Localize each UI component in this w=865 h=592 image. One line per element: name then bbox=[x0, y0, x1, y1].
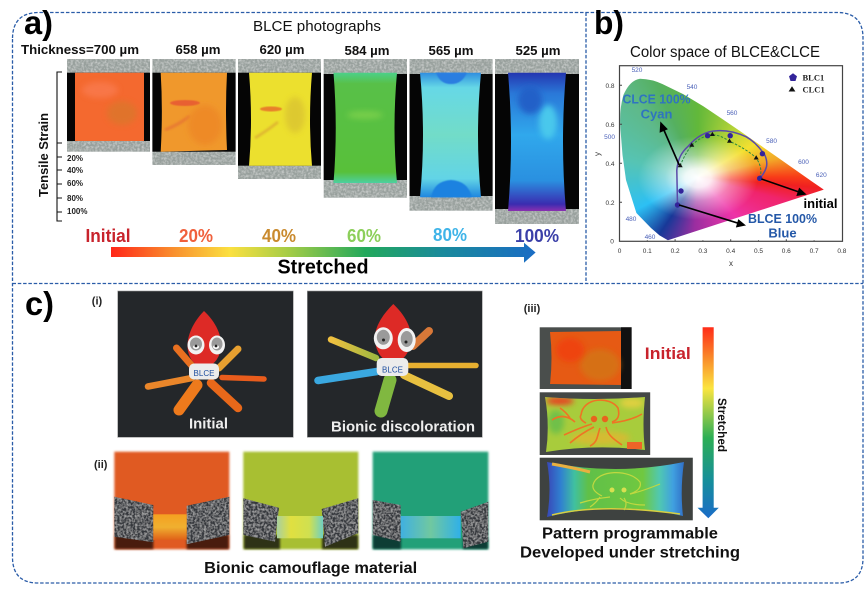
axis tick labels: 0.6 bbox=[782, 248, 791, 255]
plot frame and ticks bbox=[620, 66, 842, 241]
tensile strain axis bbox=[36, 72, 87, 221]
thickness labels: 658 µm bbox=[176, 42, 220, 57]
photo: 620 µm sample bbox=[238, 59, 321, 179]
panel: a) BLCE photographs bbox=[21, 4, 579, 278]
axis tick labels: 0.8 bbox=[605, 83, 615, 90]
photo: orange camouflage bbox=[114, 452, 229, 549]
photo: 584 µm sample bbox=[324, 59, 407, 198]
axis tick labels: 0.5 bbox=[754, 248, 763, 255]
axis tick labels: 0.6 bbox=[605, 122, 615, 129]
photo: 658 µm sample bbox=[152, 59, 236, 165]
thickness labels bbox=[21, 42, 560, 58]
axis tick labels: y bbox=[593, 152, 602, 156]
photo: pattern emerging bbox=[540, 392, 650, 455]
tensile strain axis: Tensile Strain bbox=[36, 113, 51, 197]
caption: Bionic camouflage material: Bionic camouflage material bbox=[204, 560, 417, 577]
photo: bionic discoloration squid: BLCE bbox=[382, 366, 403, 374]
photo: 700 µm initial sample bbox=[67, 59, 150, 152]
strain percentage labels bbox=[86, 225, 559, 246]
panel: b) colour space bbox=[593, 4, 847, 268]
caption: Pattern programmable: Pattern programmable bbox=[542, 526, 718, 542]
tensile strain axis: 40% bbox=[67, 166, 83, 175]
tensile strain axis: 100% bbox=[67, 207, 87, 216]
wavelength labels: 540 bbox=[687, 84, 698, 91]
BLC1 markers bbox=[675, 133, 765, 208]
wavelength labels: 460 bbox=[645, 234, 656, 241]
chart annotations: initial bbox=[804, 196, 837, 211]
thickness labels: 565 µm bbox=[428, 43, 474, 58]
axis tick labels: 0 bbox=[618, 248, 622, 255]
label: (iii): (iii) bbox=[524, 303, 541, 315]
photo: bionic discoloration squid bbox=[307, 291, 482, 437]
thickness labels: 525 µm bbox=[516, 43, 560, 58]
photo: teal camouflage bbox=[373, 452, 488, 549]
BLC1 curve bbox=[677, 131, 767, 205]
caption: Developed under stretching: Developed under stretching bbox=[520, 544, 740, 562]
wavelength labels: 580 bbox=[766, 138, 777, 145]
thickness labels: Thickness=700 µm bbox=[21, 42, 139, 57]
photo: pattern fully stretched bbox=[540, 458, 693, 520]
strain percentage labels: 60% bbox=[347, 226, 381, 246]
photo: initial squid bbox=[118, 291, 293, 437]
wavelength labels: 480 bbox=[626, 216, 637, 223]
axis tick labels: 0.1 bbox=[643, 248, 652, 255]
photo: 565 µm sample bbox=[410, 59, 493, 211]
photo: initial pattern sample bbox=[540, 327, 632, 389]
axis tick labels: 0.3 bbox=[698, 248, 708, 255]
photo: 525 µm sample bbox=[495, 59, 579, 224]
photo: initial squid: BLCE bbox=[194, 369, 214, 378]
label: Stretched: Stretched bbox=[278, 256, 368, 278]
thickness labels: 584 µm bbox=[344, 43, 390, 58]
wavelength labels: 600 bbox=[798, 159, 809, 166]
axis tick labels bbox=[593, 83, 847, 268]
axis tick labels: 0.4 bbox=[605, 161, 615, 168]
photo: bionic discoloration squid: Bionic discoloration bbox=[331, 418, 475, 436]
chart annotations: CLCE 100% bbox=[622, 92, 691, 106]
label: Initial (iii): Initial bbox=[645, 345, 691, 363]
strain percentage labels: 20% bbox=[179, 226, 213, 246]
strain percentage labels: 100% bbox=[515, 226, 559, 246]
axis tick labels: 0.2 bbox=[671, 248, 680, 255]
label: Stretched (vertical): Stretched bbox=[715, 398, 727, 452]
legend: BLC1 bbox=[802, 72, 824, 82]
heading: c): c) bbox=[25, 285, 54, 322]
arrow: vertical gradient bbox=[698, 327, 719, 518]
arrows bbox=[660, 123, 805, 226]
heading: a): a) bbox=[24, 4, 53, 41]
strain percentage labels: Initial bbox=[86, 226, 130, 246]
tensile strain axis: 60% bbox=[67, 179, 83, 188]
legend: CLC1 bbox=[802, 84, 825, 94]
CLC1 markers bbox=[678, 132, 759, 167]
photo: yellow-green camouflage bbox=[243, 452, 358, 549]
label: (i): (i) bbox=[92, 296, 103, 308]
axis tick labels: 0.8 bbox=[837, 248, 847, 255]
strain percentage labels: 80% bbox=[433, 225, 467, 245]
wavelength labels: 520 bbox=[632, 67, 643, 74]
thickness labels: 620 µm bbox=[260, 42, 304, 57]
axis tick labels: 0.2 bbox=[605, 200, 615, 207]
CLC1 curve bbox=[680, 135, 761, 178]
chart annotations: Cyan bbox=[641, 106, 672, 122]
chromaticity chart bbox=[593, 65, 847, 268]
tensile strain axis: 80% bbox=[67, 194, 83, 203]
chart annotations: BLCE 100% bbox=[748, 211, 817, 226]
wavelength labels: 500 bbox=[604, 134, 615, 141]
label: (ii): (ii) bbox=[94, 459, 108, 471]
chart annotations: Blue bbox=[768, 226, 797, 240]
horseshoe colour gamut bbox=[620, 78, 824, 240]
axis tick labels: 0 bbox=[610, 238, 614, 246]
wavelength labels bbox=[604, 67, 827, 241]
panel: c) applications bbox=[25, 285, 740, 577]
heading: b): b) bbox=[594, 4, 624, 41]
legend bbox=[789, 72, 825, 94]
axis tick labels: 0.4 bbox=[726, 248, 736, 255]
axis tick labels: 0.7 bbox=[810, 248, 819, 255]
title: BLCE photographs: BLCE photographs bbox=[253, 18, 381, 35]
wavelength labels: 560 bbox=[727, 110, 738, 117]
strain percentage labels: 40% bbox=[262, 226, 296, 246]
photo: initial squid: Initial bbox=[189, 416, 228, 432]
axis tick labels: x bbox=[729, 259, 733, 268]
tensile strain axis: 20% bbox=[67, 154, 83, 163]
arrow: stretched gradient bbox=[111, 243, 536, 263]
wavelength labels: 620 bbox=[816, 172, 827, 179]
chart annotations bbox=[622, 92, 837, 240]
title: Color space of BLCE&CLCE: Color space of BLCE&CLCE bbox=[630, 44, 820, 61]
